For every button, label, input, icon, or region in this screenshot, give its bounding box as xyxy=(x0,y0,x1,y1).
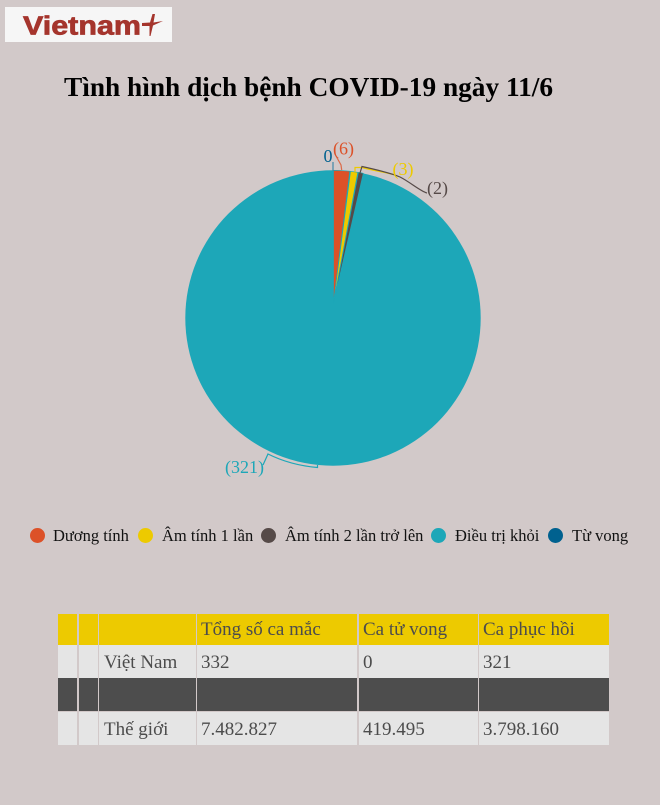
legend: positive: Dương tính xyxy=(53,526,129,545)
data table xyxy=(58,614,609,745)
legend: deaths: Từ vong xyxy=(572,526,628,545)
legend: recovered: Điều trị khỏi xyxy=(455,526,539,545)
row: world: 3.798.160 xyxy=(483,719,559,740)
logo xyxy=(5,7,172,42)
legend: negative once: Âm tính 1 lần xyxy=(162,526,253,545)
row: Vietnam: 0 xyxy=(363,652,372,673)
row: world: Thế giới xyxy=(104,719,168,740)
header row: Ca tử vong xyxy=(363,619,447,640)
row: world: 419.495 xyxy=(363,719,425,740)
label: positive 6: (6) xyxy=(333,138,354,160)
slice: negative twice xyxy=(334,172,363,303)
row: Vietnam: 332 xyxy=(201,652,230,673)
title: Tình hình dịch bệnh COVID-19 ngày 11/6 xyxy=(64,72,553,102)
slice: positive xyxy=(334,170,350,303)
logo wordmark: Vietnam xyxy=(23,12,141,40)
slice: negative once xyxy=(334,171,358,303)
row: Vietnam xyxy=(58,645,609,678)
header row: Tổng số ca mắc xyxy=(201,619,321,640)
row: world: 7.482.827 xyxy=(201,719,277,740)
header row: Ca phục hồi xyxy=(483,619,575,640)
legend xyxy=(30,526,628,545)
row: world xyxy=(58,712,609,745)
label: negative twice 2: (2) xyxy=(427,178,448,199)
label: deaths 0: 0 xyxy=(324,146,332,166)
legend: negative twice or more: Âm tính 2 lần trở lên xyxy=(285,526,423,545)
row: Vietnam: Việt Nam xyxy=(104,652,177,673)
pie chart xyxy=(185,138,481,478)
label: negative once 3: (3) xyxy=(392,159,414,180)
separator row xyxy=(58,678,609,711)
slice: recovered xyxy=(185,170,481,466)
label: recovered 321: (321) xyxy=(225,457,264,478)
row: Vietnam: 321 xyxy=(483,652,512,673)
leader lines xyxy=(263,156,427,468)
header row xyxy=(58,614,609,645)
